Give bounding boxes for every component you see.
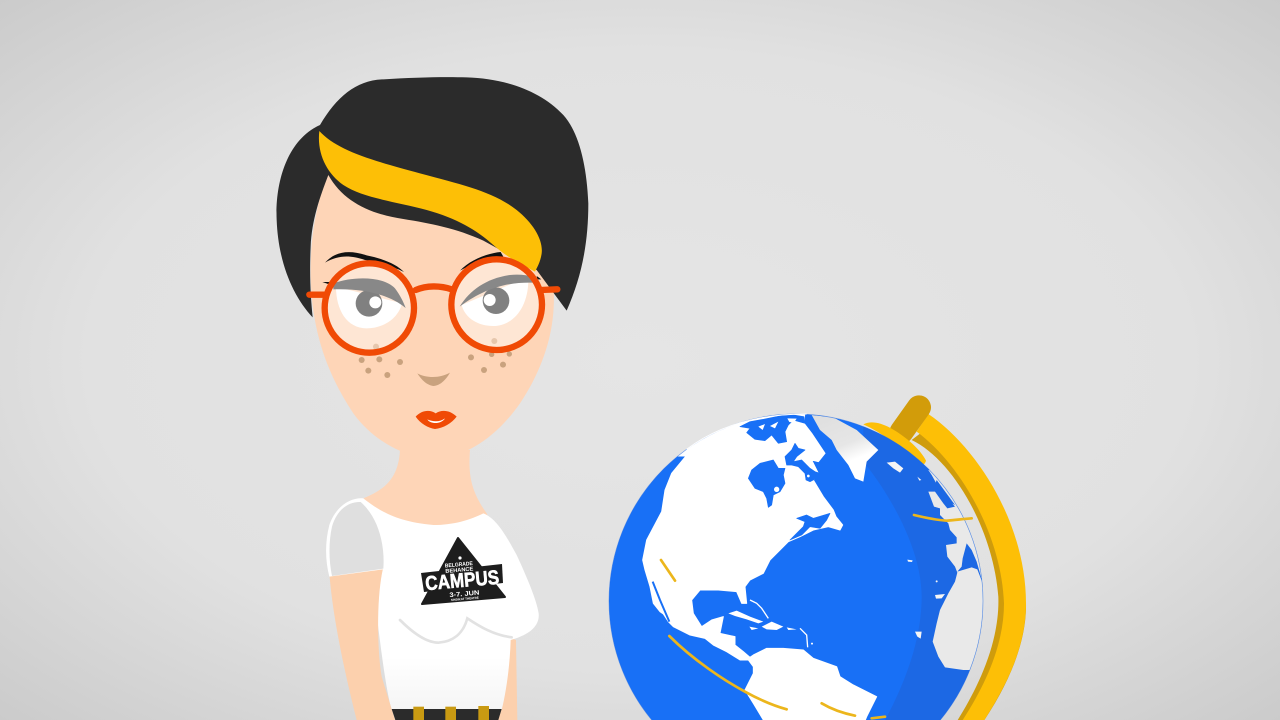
face	[311, 170, 554, 459]
Atlantic islands	[887, 462, 945, 639]
Europe and Africa	[886, 462, 983, 670]
Americas	[633, 410, 877, 720]
logo text: BEHANCE	[445, 566, 474, 575]
hair streak	[319, 131, 542, 272]
shirt fold line	[400, 618, 512, 643]
globe with stand	[609, 390, 1060, 720]
northern waters	[740, 415, 830, 540]
right highlight	[484, 294, 496, 306]
eyebrows	[322, 252, 541, 285]
right arm	[498, 637, 517, 720]
sleeve	[326, 498, 384, 577]
Iceland	[887, 462, 903, 473]
right eye	[452, 260, 541, 349]
Greenland	[812, 415, 878, 482]
Arctic islands	[758, 418, 810, 492]
teeth	[427, 418, 445, 423]
ocean shadow crescent	[864, 426, 983, 720]
logo: Belgrade Behance Campus	[421, 538, 505, 604]
logo text	[424, 559, 501, 604]
body	[326, 450, 539, 720]
right lens	[452, 260, 541, 349]
left iris	[356, 290, 382, 317]
sleeve inner	[329, 502, 384, 576]
right iris	[483, 287, 509, 314]
left highlight	[369, 296, 381, 308]
right eyelid	[460, 275, 534, 307]
left lens	[325, 263, 414, 353]
Arctic channels	[740, 415, 805, 443]
logo text: SINDIKAT THEATRE	[451, 596, 479, 602]
stand dark inner arc	[912, 423, 1026, 720]
shirt	[363, 498, 539, 710]
logo text: BELGRADE	[445, 561, 473, 569]
stand bright arc	[917, 414, 1026, 720]
right eye white	[462, 277, 528, 326]
left arm	[329, 567, 395, 720]
belt	[392, 709, 502, 720]
left eye white	[336, 287, 402, 328]
Mediterranean	[957, 544, 982, 582]
nose	[417, 373, 450, 386]
belt loops	[413, 706, 489, 720]
head	[277, 77, 588, 459]
British Isles blue gap	[935, 480, 955, 505]
left eye	[325, 263, 414, 353]
logo text: 3-7. JUN	[449, 590, 480, 599]
Gulf of California	[653, 582, 669, 622]
globe	[609, 414, 983, 720]
ocean	[609, 414, 983, 720]
logo star	[458, 556, 462, 560]
lips	[416, 411, 457, 429]
Gulf of St Lawrence	[790, 513, 830, 540]
hair	[277, 77, 588, 317]
logo text: CAMPUS	[424, 567, 500, 595]
freckles	[359, 338, 512, 378]
stand rod	[902, 407, 919, 432]
top highlight	[687, 414, 807, 449]
glasses	[309, 259, 557, 353]
Hudson Bay	[748, 460, 785, 507]
Caribbean islands	[728, 600, 813, 647]
logo triangle	[422, 538, 505, 604]
globe edge	[609, 414, 983, 720]
character: woman with glasses	[277, 77, 588, 720]
stand cap	[863, 422, 926, 465]
Foxe Basin and Hudson Strait	[785, 443, 820, 482]
neck	[363, 450, 500, 547]
flight lines	[661, 515, 972, 718]
logo banner	[421, 564, 503, 592]
left eyelid	[333, 278, 406, 308]
